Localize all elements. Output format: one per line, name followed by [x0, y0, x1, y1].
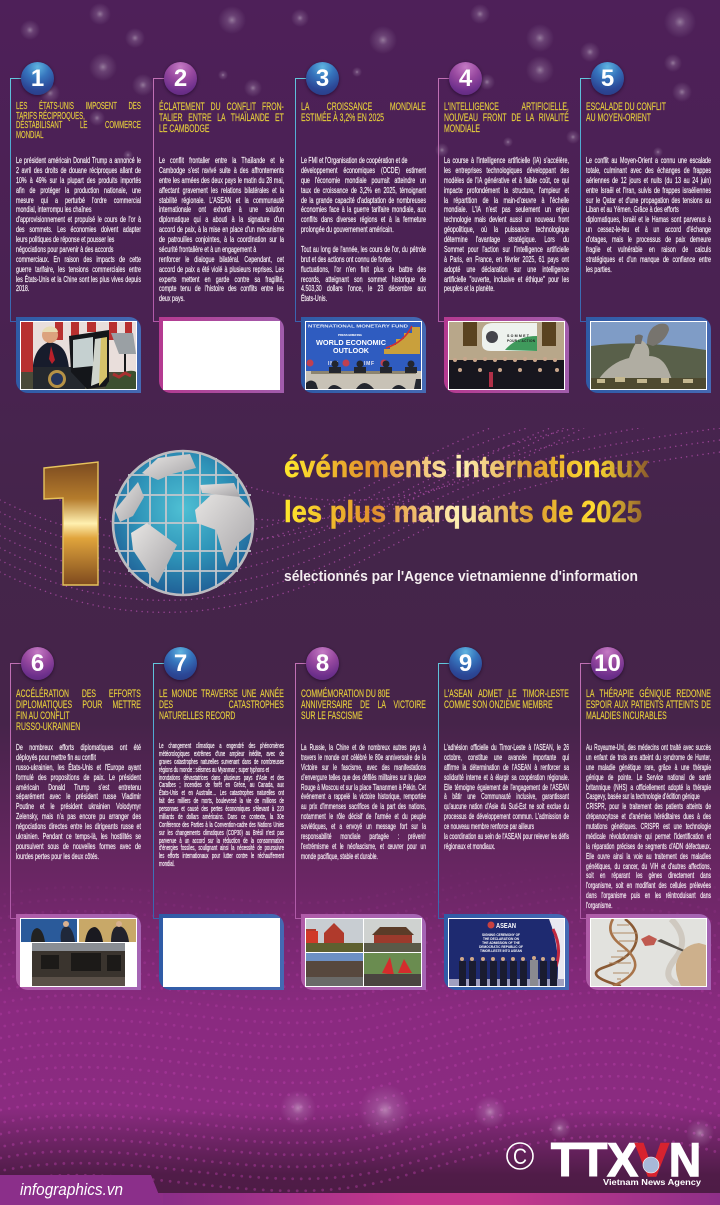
- text: event 4: les entreprises technologiques développant des: [444, 165, 569, 175]
- text: event 8: responsabilité mondiale partagée : prévenir: [301, 831, 426, 841]
- text: event 10: une maladie génétique rare, grâce à une thérapie: [586, 762, 711, 772]
- panel: event 3: [295, 62, 426, 393]
- text: event 7: sur les changements climatiques (COP30) au Brésil n'est pas: [159, 829, 284, 837]
- text: event 7: météorologiques extrêmes d'une ampleur inédite, avec de: [159, 750, 284, 758]
- text: event 7: les efforts internationaux pour lutter contre le réchauffement: [159, 852, 284, 860]
- text: event 9: Elle témoigne également de l'engagement de l'ASEAN: [444, 782, 569, 792]
- copyright mark: [507, 1143, 533, 1169]
- text: event 4: technologie mais devient aussi un nouveau front: [444, 214, 569, 224]
- footer gradient strip: [163, 1193, 720, 1205]
- text: event 8: Victoire sur le fascisme, avec des manifestations: [301, 762, 426, 772]
- text: event 2: experts mettent en garde contre sa fragilité,: [159, 274, 284, 284]
- text: event 2: internationale ont exhorté à une solution: [159, 204, 284, 214]
- text: event 9: régionaux et mondiaux.: [444, 841, 495, 851]
- heading: event 6: [16, 687, 141, 732]
- text: event 9: [444, 742, 570, 851]
- text: event 1: mondial, interrompu les chaînes: [16, 204, 92, 214]
- text: event 4: géopolitique, où la puissance technologique: [444, 224, 569, 234]
- text: event 8: au prix d'immenses sacrifices de la part des nations,: [301, 801, 426, 811]
- text: event 10: un enfant de trois ans atteint du syndrome de Hunter,: [586, 752, 711, 762]
- text: event 6: [16, 742, 141, 861]
- text: event 9: ce nouveau membre renforce par ailleurs: [444, 821, 534, 831]
- number badge 2: 2: [174, 64, 187, 92]
- text: event 6: De nombreux efforts diplomatiques ont été: [16, 742, 141, 752]
- text: event 2: deux pays.: [159, 293, 185, 303]
- text: event 7: graves catastrophes naturelles survenant dans de nombreuses: [159, 758, 284, 766]
- subtitle: sélectionnés par l'Agence vietnamienne d'information: [284, 568, 638, 585]
- text: event 4: modèles de l'IA générative et à faible coût, ce qui: [444, 175, 569, 185]
- heading: event 1: DÉSTABILISANT LE COMMERCE: [16, 120, 141, 131]
- heading: event 3: ESTIMÉE À 3,2% EN 2025: [301, 112, 384, 124]
- text: event 10: Elle ouvre ainsi la voie au traitement des maladies: [586, 851, 711, 861]
- text: event 9: processus de développement commun. L'admission de: [444, 811, 569, 821]
- photo: IMF World Economic Outlook briefing: WORLD ECONOMIC: [316, 338, 387, 346]
- number badge 5: [591, 62, 624, 94]
- number badge 8: [306, 646, 339, 680]
- text: event 7: personnes et causé des pertes économiques s'élevant à 220: [159, 805, 284, 813]
- text: event 3: États-Unis.: [301, 293, 327, 303]
- heading: event 2: TALIER ENTRE LA THAÏLANDE ET: [159, 112, 284, 124]
- heading: event 4: L'INTELLIGENCE ARTIFICIELLE,: [444, 100, 569, 112]
- big numeral one: [44, 462, 98, 585]
- photo: ASEAN signing ceremony: THE ADMISSION OF THE: [482, 940, 520, 944]
- text: event 6: formulé des propositions de paix. Le président: [16, 772, 141, 782]
- number badge 6: 6: [31, 650, 44, 676]
- panel: event 10: [580, 647, 712, 990]
- text: event 7: régions du monde : séismes au Myanmar ; super typhons et: [159, 766, 269, 774]
- text: event 1: 2 avril des droits de douane réciproques allant de: [16, 165, 141, 175]
- photo: ASEAN signing ceremony: TIMOR-LESTE INTO ASEAN: [480, 948, 523, 952]
- text: event 7: mondial.: [159, 860, 175, 868]
- heading: event 1: TARIFS RÉCIPROQUES,: [16, 111, 85, 122]
- text: event 4: mondiale. L'IA n'est pas seulement un enjeu: [444, 204, 569, 214]
- text: event 2: accord de paix a été violé à plusieurs reprises. Les: [159, 264, 284, 274]
- panel: event 7: [153, 647, 284, 990]
- heading: event 10: [586, 687, 711, 722]
- heading: event 6: RUSSO-UKRAINIEN: [16, 720, 80, 732]
- heading: event 8: ANNIVERSAIRE DE LA VICTOIRE: [301, 698, 426, 710]
- text: event 6: russo-ukrainien, les États-Unis et l'Europe ayant: [16, 762, 141, 772]
- heading: event 7: LE MONDE TRAVERSE UNE ANNÉE: [159, 688, 284, 700]
- text: event 9: solidarité interne et à élargir sa coopération régionale.: [444, 772, 569, 782]
- text: event 6: lourdes pertes pour les deux côtés.: [16, 851, 99, 861]
- text: event 8: monde pacifique, stable et durable.: [301, 851, 378, 861]
- text: event 5: [586, 155, 712, 274]
- text: event 10: génétiques, du cancer, du VIH et d'autres affections,: [586, 860, 711, 870]
- text: event 3: que l'économie mondiale pourrait atteindre un: [301, 175, 426, 185]
- text: event 10: soit en réparant les gènes directement dans: [586, 870, 711, 880]
- text: event 1: afin de protéger la production nationale, une: [16, 185, 141, 195]
- photo: ASEAN signing ceremony: SIGNING CEREMONY OF: [482, 932, 520, 936]
- text: event 10: Au Royaume-Uni, des médecins ont traité avec succès: [586, 742, 711, 752]
- number badge 2: [164, 62, 197, 94]
- photo: IMF World Economic Outlook briefing: PRESS BRIEFING: [338, 332, 363, 336]
- text: event 1: négociations pour parvenir à des accords: [16, 244, 113, 254]
- text: event 10: [586, 742, 712, 910]
- heading: event 8: COMMÉMORATION DU 80E: [301, 688, 390, 700]
- text: event 3: taux de croissance de 3,2% en 2025, témoignant: [301, 185, 426, 195]
- heading: event 2: LE CAMBODGE: [159, 122, 209, 134]
- heading: event 9: COMME SON ONZIÈME MEMBRE: [444, 698, 553, 710]
- main title: événements internationaux: [284, 449, 650, 484]
- text: event 7: fait des milliers de morts, bouleversé la vie de millions de: [159, 797, 284, 805]
- text: event 5: sur le Qatar et d'une propagation des tensions au: [586, 194, 711, 204]
- text: event 5: fragile et vulnérable en raison de calculs: [586, 244, 711, 254]
- number badge 3: 3: [316, 64, 329, 92]
- photo: ASEAN signing ceremony: ASEAN: [496, 922, 516, 930]
- text: event 1: leurs politiques de réponse et pousser les: [16, 234, 114, 244]
- number badge 4: [449, 62, 482, 94]
- text: event 6: séparément avec le président russe Vladimir: [16, 791, 141, 801]
- logo: TTXVN Vietnam News Agency: [506, 1135, 701, 1187]
- heading: event 4: [444, 100, 569, 134]
- heading: event 6: DIPLOMATIQUES POUR METTRE: [16, 698, 141, 710]
- heading: event 9: [444, 688, 569, 710]
- panel: event 8: [295, 647, 426, 990]
- text: event 4: La course à l'intelligence artificielle (IA) s'accélère,: [444, 155, 569, 165]
- text: event 2: renforcer le dialogue bilatéral. Cependant, cet: [159, 254, 284, 264]
- text: event 6: poursuivent sous de nouvelles formes avec de: [16, 841, 141, 851]
- text: event 8: travers le monde ont célébré le 80e anniversaire de la: [301, 752, 426, 762]
- text: event 4: détermine l'avantage stratégique. Lors du: [444, 234, 569, 244]
- text: event 3: records, atteignant son sommet historique de: [301, 274, 426, 284]
- text: event 7: inondations dévastatrices dans plusieurs pays d'Asie et des: [159, 774, 284, 782]
- text: event 7: États-Unis et en Australie… Les catastrophes naturelles ont: [159, 789, 284, 797]
- text: event 1: des sommets. Les économies doivent adapter: [16, 224, 141, 234]
- text: event 2: affectant gravement les relations bilatérales et la: [159, 185, 284, 195]
- heading: event 10: MALADIES INCURABLES: [586, 710, 667, 722]
- text: event 7: Le changement climatique a engendré des phénomènes: [159, 742, 284, 750]
- wordmark: [551, 1133, 701, 1186]
- photo: smoke over a hillside: [586, 317, 711, 393]
- text: event 10: la réparation précises de segments d'ADN défectueux.: [586, 841, 711, 851]
- text: event 10: l'organisme.: [586, 900, 612, 910]
- photo: IMF World Economic Outlook briefing: NTERNATIONAL MONETARY FUND: [308, 323, 408, 328]
- text: event 5: Le conflit au Moyen-Orient a connu une escalade: [586, 155, 711, 165]
- number badge 9: [449, 646, 482, 680]
- heading: event 1: MONDIAL: [16, 130, 43, 141]
- main title: les plus marquants de 2025: [284, 494, 642, 529]
- number badge 9: 9: [459, 650, 472, 676]
- text: event 3: Tout au long de l'année, les cours de l'or, du pétrole: [301, 244, 426, 254]
- number badge 6: [21, 646, 54, 680]
- number badge 1: 1: [31, 64, 44, 92]
- number badge 4: 4: [459, 64, 472, 92]
- number badge 8: 8: [316, 650, 329, 676]
- heading: event 8: [301, 687, 426, 722]
- photo: IMF World Economic Outlook briefing: [301, 317, 426, 393]
- text: event 5: aériennes de 12 jours et nuits (du 13 au 24 juin): [586, 175, 711, 185]
- text: event 4: artificielle "ouverte, inclusive et éthique" pour les: [444, 274, 569, 284]
- text: event 3: prolongée du gouvernement américain.: [301, 224, 394, 234]
- text: event 3: conflits dans diverses régions et à la fermeture: [301, 214, 426, 224]
- text: event 6: américain Donald Trump s'est entretenu: [16, 782, 141, 792]
- text: event 4: adopté une déclaration sur une intelligence: [444, 264, 569, 274]
- copyright mark: C: [513, 1144, 527, 1169]
- text: event 10: génique de pointe. Le Service national de santé: [586, 772, 711, 782]
- text: event 3: brut et des actions ont connu de fortes: [301, 254, 392, 264]
- heading: event 5: AU MOYEN-ORIENT: [586, 112, 651, 124]
- text: event 5: stratégiques et d'un manque de confiance entre: [586, 254, 711, 264]
- photo: diplomatic meetings and damaged building: [16, 914, 141, 990]
- text: event 2: accord de paix, à la mise en place d'un mécanisme: [159, 224, 284, 234]
- text: event 6: ukrainien. Pendant ce temps-là, les hostilités se: [16, 831, 141, 841]
- heading: event 2: ÉCLATEMENT DU CONFLIT FRON-: [159, 100, 284, 112]
- text: event 7: milliards de dollars américains. Dans ce contexte, la 30e: [159, 813, 284, 821]
- text: event 3: économies face à la guerre tarifaire mondiale, aux: [301, 204, 426, 214]
- photo: ASEAN signing ceremony: DEMOCRATIC REPUBLIC OF: [479, 944, 523, 948]
- photo: Trump at the podium: [16, 317, 141, 393]
- text: event 6: Zelensky, mais n'a pas encore pu arranger des: [16, 811, 141, 821]
- number badge 1: [21, 62, 54, 94]
- text: event 2: stabilité régionale. L'ASEAN et la communauté: [159, 194, 284, 204]
- photo: blank white placeholder: [159, 317, 284, 393]
- heading: event 10: LA THÉRAPIE GÉNIQUE REDONNE: [586, 688, 711, 700]
- text: event 7: parvenue à un accord sur la réduction de la consommation: [159, 836, 284, 844]
- heading: event 3: LA CROISSANCE MONDIALE: [301, 100, 426, 112]
- main title: [284, 449, 650, 529]
- text: event 3: de la grande capacité d'adaptation de nombreuses: [301, 194, 426, 204]
- text: event 8: notamment le rôle décisif de l'armée et du peuple: [301, 811, 426, 821]
- text: event 10: mutations génétiques. CRISPR est une technologie: [586, 821, 711, 831]
- text: event 5: Liban et au Yémen. Grâce à des efforts: [586, 204, 679, 214]
- heading: event 1: LES ÉTATS-UNIS IMPOSENT DES: [16, 101, 141, 112]
- text: event 3: fluctuations, l'or n'en finit plus de battre des: [301, 264, 426, 274]
- text: event 2: de patrouilles conjointes, à la coordination sur la: [159, 234, 284, 244]
- text: event 3: développement économiques (OCDE) estiment: [301, 165, 426, 175]
- heading: event 7: [159, 687, 284, 722]
- text: event 2: Cambodge s'est ravivé suite à des affrontements: [159, 165, 284, 175]
- text: event 2: [159, 155, 284, 303]
- number badge 5: 5: [601, 64, 614, 92]
- text: event 4: impacte profondément la structure, l'ampleur et: [444, 185, 569, 195]
- panel: event 9: [438, 647, 570, 990]
- text: event 9: affirme la détermination de l'ASEAN à renforcer sa: [444, 762, 569, 772]
- text: event 2: diplomatique qui a abouti à la signature d'un: [159, 214, 284, 224]
- text: event 6: Poutine et le président ukrainien Volodymyr: [16, 801, 141, 811]
- text: event 8: soviétiques, et a envoyé un message fort sur la: [301, 821, 426, 831]
- text: event 10: l'organisme, soit en modifiant des cellules prélevées: [586, 880, 711, 890]
- text: event 1: mesure qui a perturbé l'ordre commercial: [16, 194, 141, 204]
- text: event 4: peuples et la planète.: [444, 283, 495, 293]
- heading: event 7: DES CATASTROPHES: [159, 698, 284, 710]
- text: event 3: 4.503,30 dollars l'once, le 23 décembre aux: [301, 283, 426, 293]
- text: event 5: d'otages, mais le processus de paix demeure: [586, 234, 711, 244]
- text: event 2: compte tenu de l'histoire des conflits entre les: [159, 283, 284, 293]
- text: event 7: Conférence des Parties à la Convention-cadre des Nations Unies: [159, 821, 284, 829]
- text: event 5: les parties.: [586, 264, 612, 274]
- text: event 5: entre Israël et l'Iran, suivis de frappes israéliennes: [586, 185, 711, 195]
- photo: IMF World Economic Outlook briefing: IMF: [364, 360, 374, 366]
- heading: event 10: ESPOIR AUX PATIENTS ATTEINTS DE: [586, 698, 711, 710]
- heading: event 6: FIN AU CONFLIT: [16, 710, 70, 722]
- number badge 7: [164, 646, 197, 680]
- text: event 10: dans l'organisme puis en les réintroduisant dans: [586, 890, 711, 900]
- text: event 1: commerciaux. En raison des impacts de cette: [16, 254, 141, 264]
- text: event 1: [16, 155, 142, 293]
- text: event 1: les États-Unis et la Chine sont les plus vives depuis: [16, 274, 141, 284]
- text: event 8: d'envergure telles que des défilés militaires sur la place: [301, 772, 426, 782]
- text: event 8: l'extrémisme et le néofascisme, et œuvrer pour un: [301, 841, 426, 851]
- number badge 3: [306, 62, 339, 94]
- text: event 1: 2018.: [16, 283, 29, 293]
- photo: ASEAN signing ceremony: [444, 914, 569, 990]
- heading: event 5: ESCALADE DU CONFLIT: [586, 100, 666, 112]
- logo: TTXVN Vietnam News Agency: Vietnam News Agency: [603, 1177, 701, 1187]
- text: event 9: L'adhésion officielle du Timor-Leste à l'ASEAN, le 26: [444, 742, 569, 752]
- text: event 6: déployés pour mettre fin au conflit: [16, 752, 96, 762]
- text: event 9: qu'aucune nation d'Asie du Sud-Est ne soit exclue du: [444, 801, 569, 811]
- text: event 1: guerre tarifaire, les tensions commerciales entre: [16, 264, 141, 274]
- panel: event 6: [10, 647, 141, 990]
- number badge 10: [591, 646, 624, 680]
- photo: IMF World Economic Outlook briefing: OUTLOOK: [333, 346, 370, 354]
- text: event 2: entre les armées des deux pays le matin du 28 mai,: [159, 175, 284, 185]
- text: event 6: négociations directes entre les dirigeants russe et: [16, 821, 141, 831]
- text: event 4: Sommet pour l'action sur l'intelligence artificielle: [444, 244, 569, 254]
- text: event 8: événement a rappelé la victoire historique, remportée: [301, 791, 426, 801]
- panel: event 5: [580, 62, 712, 393]
- heading: event 1: [16, 100, 141, 141]
- text: event 3: Le FMI et l'Organisation de coopération et de: [301, 155, 407, 165]
- heading: event 4: NOUVEAU FRONT DE LA RIVALITÉ: [444, 112, 569, 124]
- photo: AI Action Summit group picture: SOMMET: [507, 334, 530, 338]
- photo: four victory parade pictures: [301, 914, 426, 990]
- photo: IMF World Economic Outlook briefing: IMF: [328, 360, 338, 366]
- heading: event 5: [586, 100, 666, 124]
- heading: event 6: ACCÉLÉRATION DES EFFORTS: [16, 688, 141, 700]
- text: event 8: Rouge à Moscou et sur la place Tiananmen à Pékin. Cet: [301, 782, 426, 792]
- heading: event 3: [301, 100, 426, 124]
- panel: event 2: [153, 62, 284, 393]
- number badge 10: 10: [594, 650, 621, 676]
- text: event 8: [301, 742, 426, 861]
- text: event 8: La Russie, la Chine et de nombreux autres pays à: [301, 742, 426, 752]
- site url: infographics.vn: [20, 1180, 123, 1199]
- text: event 1: d'approvisionnement et propulsé le cours de l'or à: [16, 214, 141, 224]
- globe icon: [113, 451, 254, 595]
- text: event 9: octobre, constitue une avancée importante qui: [444, 752, 569, 762]
- panel: event 4: [438, 62, 569, 393]
- text: event 7: d'énergies fossiles, soulignant ainsi la nécessité de poursuivre: [159, 844, 284, 852]
- heading: event 2: [159, 100, 284, 134]
- text: event 10: britannique (NHS) a officiellement adopté la thérapie: [586, 782, 711, 792]
- text: event 10: drépanocytose et d'anémies héréditaires dues à des: [586, 811, 711, 821]
- text: event 5: totale, culminant avec des échanges de frappes: [586, 165, 711, 175]
- text: event 1: 10% à 49% sur la plupart des produits importés: [16, 175, 141, 185]
- text: event 7: Caraïbes ; incendies de forêt en Grèce, au Canada, aux: [159, 781, 284, 789]
- text: event 2: Le conflit frontalier entre la Thaïlande et le: [159, 155, 284, 165]
- text: event 10: Casgevy, basée sur la technologie d'édition génique: [586, 791, 700, 801]
- heading: event 8: SUR LE FASCISME: [301, 710, 363, 722]
- heading: event 7: NATURELLES RECORD: [159, 710, 235, 722]
- text: event 7: [159, 742, 284, 868]
- photo: ASEAN signing ceremony: THE DECLARATION ON: [483, 936, 520, 940]
- text: event 5: un cessez-le-feu et à un accord d'échange: [586, 224, 711, 234]
- photo: blank white placeholder: [159, 914, 284, 990]
- text: event 4: la répartition de la main-d'œuvre à l'échelle: [444, 194, 569, 204]
- text: event 4: [444, 155, 569, 293]
- text: event 9: à bâtir une Communauté inclusive, garantissant: [444, 791, 569, 801]
- text: event 4: à Paris, en France, en février 2025, 61 pays ont: [444, 254, 569, 264]
- text: event 1: Le président américain Donald Trump a annoncé le: [16, 155, 141, 165]
- text: event 10: médicale révolutionnaire qui permet l'identification et: [586, 831, 711, 841]
- text: event 5: diplomatiques, Israël et le Hamas sont parvenus à: [586, 214, 711, 224]
- photo: DNA helix and tweezers: [586, 914, 711, 990]
- number badge 7: 7: [174, 650, 187, 676]
- photo: AI Action Summit group picture: [444, 317, 569, 393]
- heading: event 4: MONDIALE: [444, 122, 480, 134]
- text: event 9: la coordination au sein de l'ASEAN pour relever les défis: [444, 831, 569, 841]
- heading: event 9: L'ASEAN ADMET LE TIMOR-LESTE: [444, 688, 569, 700]
- photo: AI Action Summit group picture: POUR L'ACTION: [507, 338, 536, 342]
- text: event 3: [301, 155, 426, 303]
- footer band with site tab: [0, 1175, 158, 1199]
- text: event 10: CRISPR, pour le traitement des patients atteints de: [586, 801, 711, 811]
- text: event 2: sécurité frontalière et à un engagement à: [159, 244, 256, 254]
- panel: event 1: [10, 62, 142, 393]
